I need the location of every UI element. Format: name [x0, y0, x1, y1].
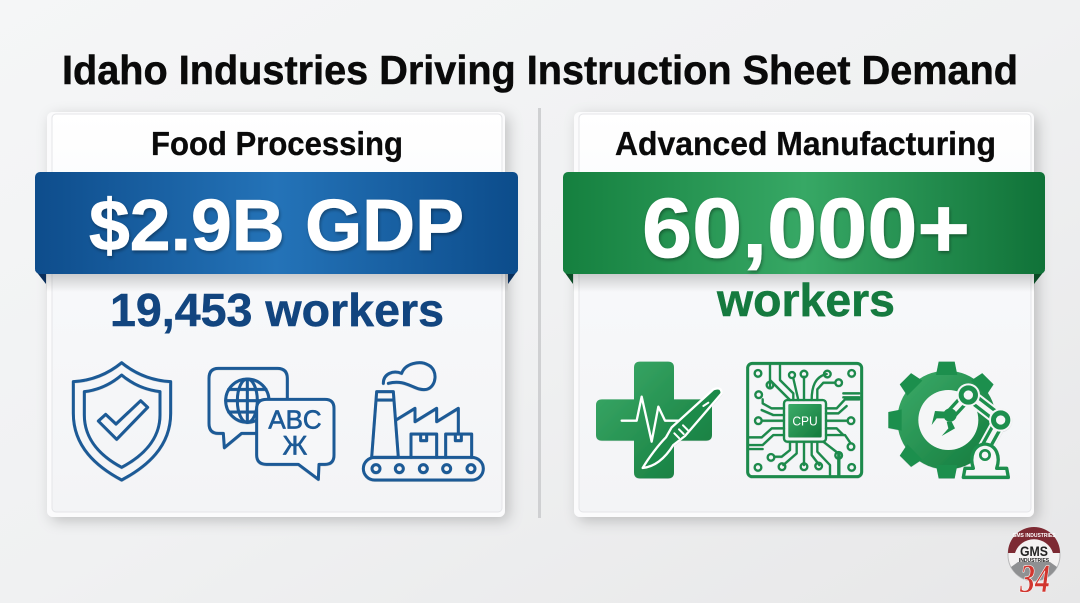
icon: CPU circuit board	[748, 363, 862, 477]
icon: translation speech bubbles	[209, 368, 334, 479]
panel: food processing	[35, 112, 518, 517]
icon: shield with check	[73, 363, 171, 480]
icon: CPU circuit board: CPU	[792, 414, 818, 428]
logo: GMS Industries 34 years: INDUSTRIES	[1019, 558, 1050, 564]
panel: advanced manufacturing	[563, 112, 1045, 517]
logo: GMS Industries 34 years: GMS INDUSTRIES	[1012, 533, 1056, 539]
icon: translation speech bubbles: ABC	[268, 405, 322, 435]
icon: factory with conveyor	[363, 363, 483, 480]
icon: gear with robot arm	[888, 362, 1011, 478]
icon row: food processing	[73, 363, 483, 480]
heading: food processing: Food Processing	[151, 125, 403, 162]
banner: 60,000+	[563, 172, 1045, 292]
title: Idaho Industries Driving Instruction Sheet Demand	[62, 47, 1018, 93]
icon: translation speech bubbles: Ж	[283, 431, 308, 461]
banner: 60,000+: 60,000+	[642, 181, 970, 275]
logo: GMS Industries 34 years	[1008, 527, 1060, 601]
icon row: advanced manufacturing	[596, 362, 1011, 478]
icon: medical cross with scalpel	[596, 362, 722, 478]
stat: workers: workers	[716, 274, 895, 326]
heading: advanced manufacturing: Advanced Manufacturing	[615, 125, 996, 162]
banner: $2.9B GDP: $2.9B GDP	[89, 186, 464, 266]
stat: 19,453 workers: 19,453 workers	[110, 284, 444, 336]
logo: GMS Industries 34 years: 34	[1019, 556, 1050, 601]
banner: $2.9B GDP	[35, 172, 518, 292]
logo: GMS Industries 34 years: GMS	[1020, 543, 1048, 559]
